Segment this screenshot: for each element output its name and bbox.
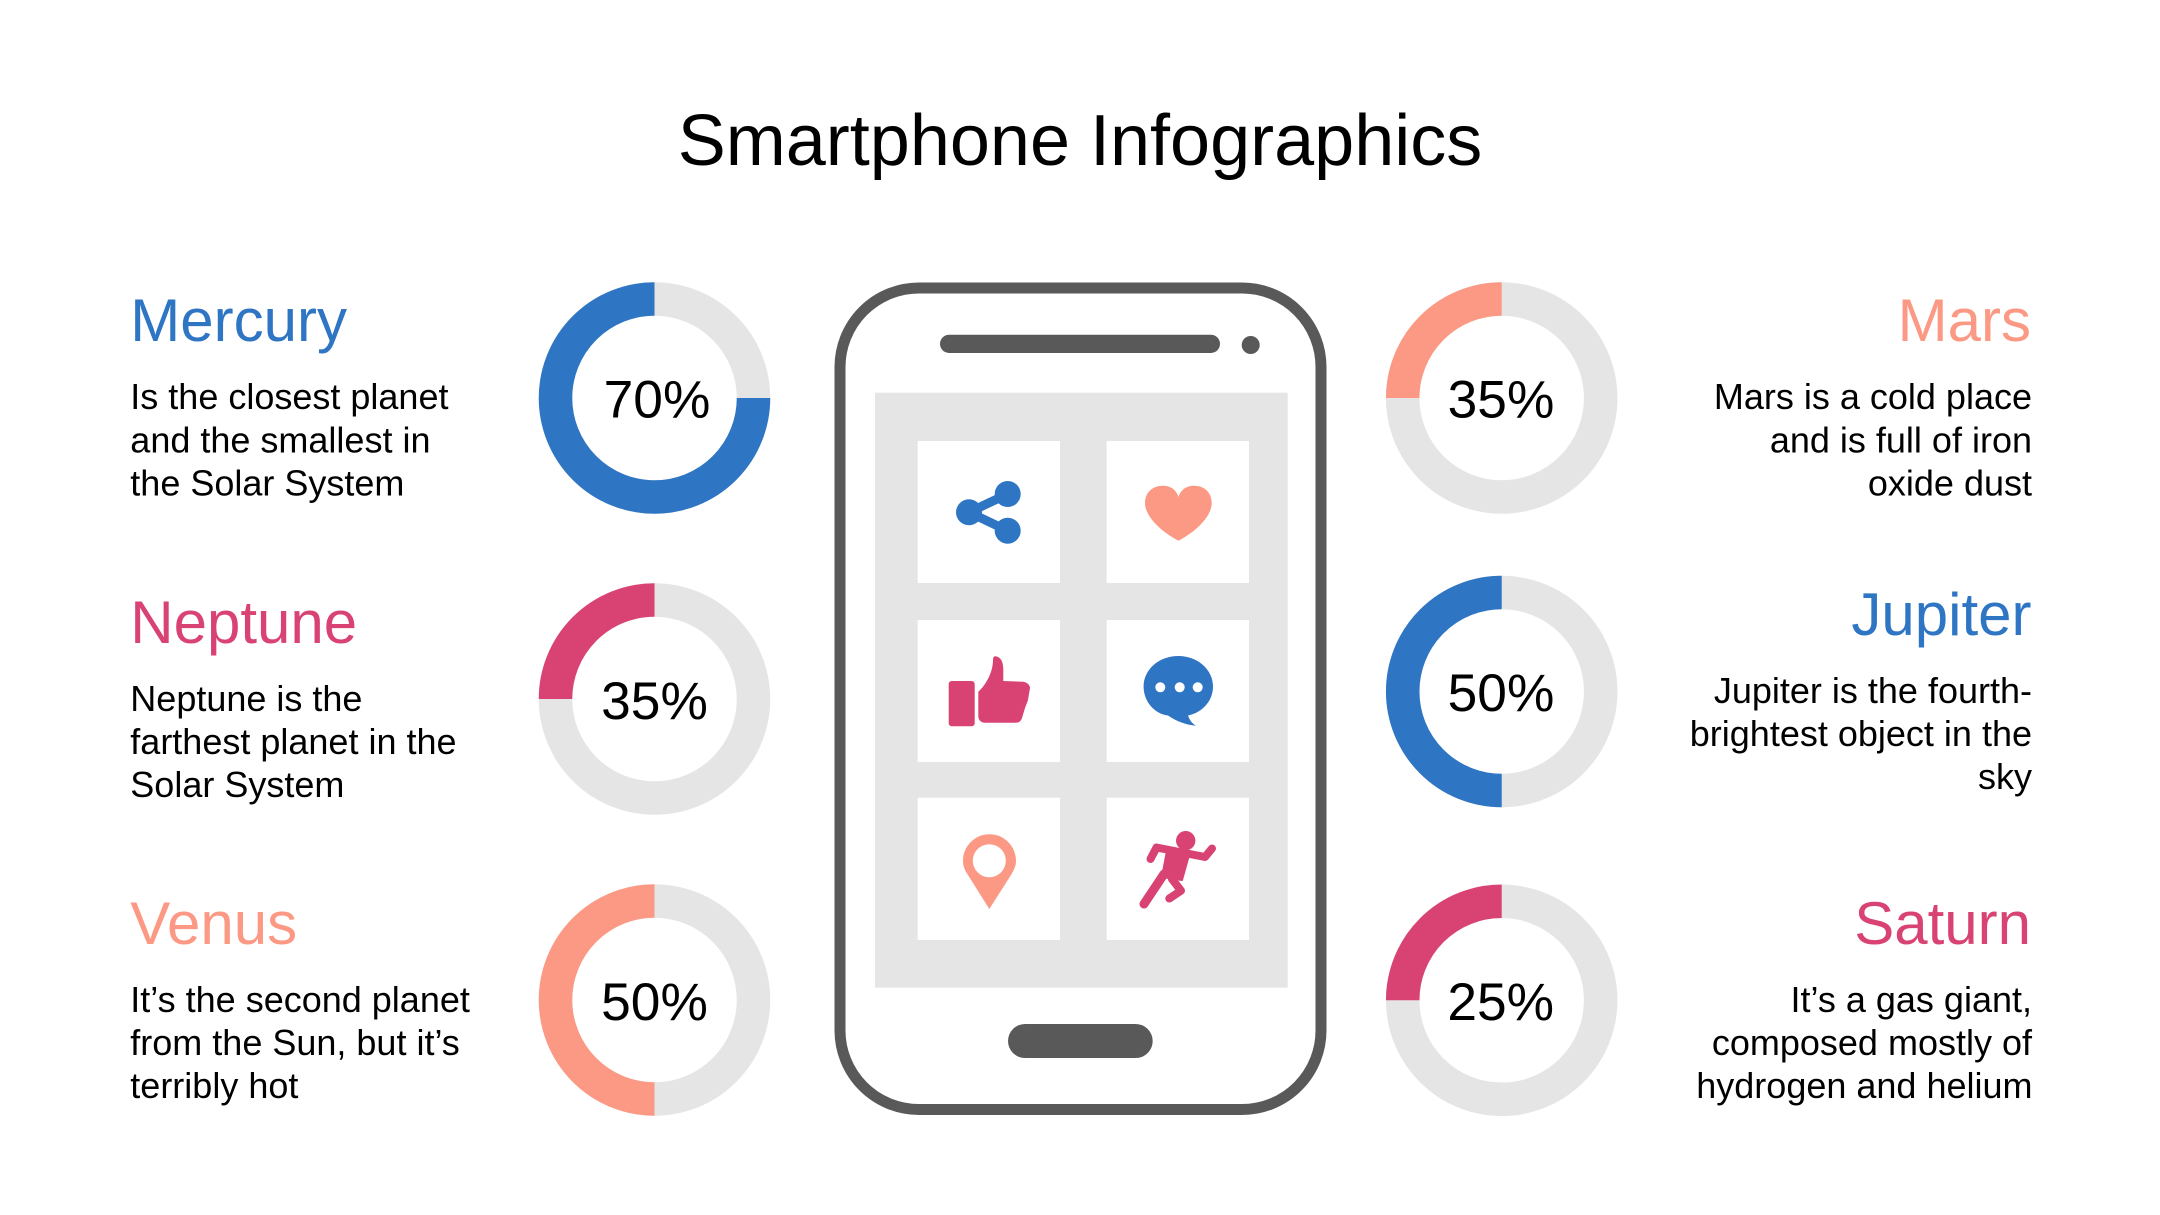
- value: 35%: 35%: [1448, 370, 1554, 430]
- phone: [840, 288, 1321, 1110]
- icon: share: [956, 481, 1021, 544]
- text block: Saturn description: hydrogen and helium: [1696, 1065, 2032, 1106]
- text block: Venus description: It’s the second planet: [130, 979, 470, 1020]
- value: 25%: 25%: [1447, 973, 1554, 1032]
- text block: Saturn description: composed mostly of: [1712, 1022, 2033, 1063]
- text block: Neptune description: farthest planet in the: [130, 721, 457, 762]
- donut chart: Saturn 25%: [1403, 901, 1601, 1099]
- heading: Venus: Venus: [130, 890, 297, 957]
- text block: Jupiter description: brightest object in the: [1690, 713, 2032, 754]
- heading: Saturn: Saturn: [1854, 890, 2031, 957]
- title: Smartphone Infographics: [678, 101, 1482, 181]
- camera: [1242, 336, 1260, 354]
- text block: Venus description: terribly hot: [130, 1065, 298, 1106]
- text block: Mars description: oxide dust: [1868, 462, 2032, 504]
- speaker: [940, 335, 1220, 353]
- text block: Mars description: Mars is a cold place: [1714, 376, 2032, 417]
- icon: heart: [1145, 486, 1212, 541]
- panel: Saturn: [1403, 890, 2033, 1106]
- icon: location pin: [963, 834, 1016, 909]
- value: 50%: 50%: [601, 973, 708, 1032]
- heading: Jupiter: Jupiter: [1851, 581, 2032, 648]
- text block: Mars description: and is full of iron: [1770, 420, 2032, 460]
- text block: Neptune description: Solar System: [130, 764, 344, 805]
- text block: Saturn description: It’s a gas giant,: [1790, 979, 2032, 1020]
- text block: Jupiter description: sky: [1978, 756, 2032, 797]
- donut chart: Mars 35%: [1403, 299, 1601, 497]
- text block: Mercury description: and the smallest in: [130, 420, 430, 460]
- text block: Venus description: from the Sun, but it’s: [130, 1022, 460, 1063]
- donut chart: Mercury 70%: [556, 299, 754, 497]
- tile: thumbs up: [918, 620, 1060, 762]
- donut chart: Neptune 35%: [556, 600, 754, 798]
- icon: thumbs up: [949, 656, 1030, 726]
- heading: Neptune: Neptune: [130, 589, 357, 656]
- panel: Neptune: [130, 589, 754, 805]
- value: 35%: 35%: [601, 672, 708, 731]
- home button: [1008, 1024, 1153, 1058]
- value: 50%: 50%: [1448, 664, 1554, 723]
- text block: Neptune description: Neptune is the: [130, 678, 362, 719]
- tile: runner: [1107, 798, 1249, 940]
- donut chart: Jupiter 50%: [1403, 592, 1601, 790]
- screen: [875, 393, 1288, 988]
- icon: chat bubble: [1144, 656, 1213, 726]
- heading: Mars: Mars: [1898, 287, 2031, 354]
- tile: heart: [1107, 441, 1249, 583]
- donut chart: Venus 50%: [556, 901, 754, 1099]
- panel: Mars: [1403, 287, 2032, 504]
- value: 70%: 70%: [604, 370, 710, 430]
- panel: Jupiter: [1403, 581, 2032, 797]
- tile: share: [918, 441, 1060, 583]
- tile: location: [918, 798, 1060, 940]
- text block: Mercury description: the Solar System: [130, 462, 404, 504]
- heading: Mercury: Mercury: [130, 287, 347, 354]
- tile: chat: [1107, 620, 1249, 762]
- phone body: [840, 288, 1321, 1110]
- text block: Jupiter description: Jupiter is the fourth-: [1714, 670, 2032, 711]
- icon: runner: [1144, 831, 1212, 904]
- text block: Mercury description: Is the closest planet: [130, 376, 448, 417]
- panel: Venus: [130, 890, 754, 1106]
- panel: Mercury: [130, 287, 754, 504]
